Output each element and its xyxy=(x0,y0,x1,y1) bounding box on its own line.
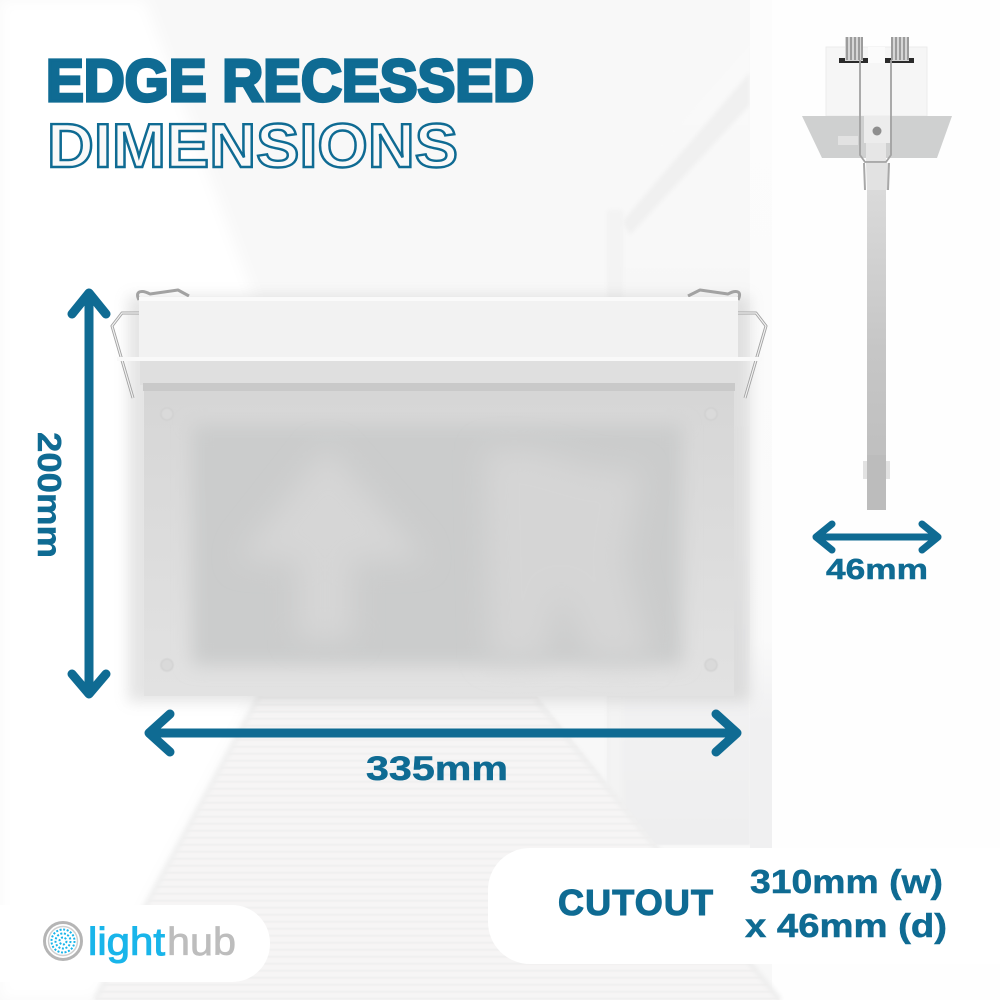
label: 46mm: 46mm xyxy=(826,554,928,586)
dark clip slots xyxy=(839,58,869,63)
lower bracket xyxy=(863,461,890,479)
arrow: width 335mm xyxy=(149,714,737,752)
left spring xyxy=(845,37,863,61)
right spring xyxy=(891,37,909,61)
title xyxy=(46,48,534,181)
cutout width: 310mm (w) xyxy=(750,863,943,900)
logo pill xyxy=(0,905,270,982)
rear box xyxy=(826,47,927,116)
soft drop shadow xyxy=(128,296,750,702)
stem xyxy=(867,190,886,510)
title line: DIMENSIONS (outlined): DIMENSIONS xyxy=(47,112,458,181)
arrow: height 200mm xyxy=(72,293,106,694)
right mounting clip xyxy=(688,290,766,398)
panel fixing dots xyxy=(161,408,717,671)
title line: EDGE RECESSED: EDGE RECESSED xyxy=(46,48,534,114)
arrow: depth 46mm xyxy=(816,524,938,550)
logo icon xyxy=(44,922,82,960)
cutout depth: x 46mm (d) xyxy=(745,907,947,944)
blurred running figure symbol xyxy=(485,450,650,660)
flange xyxy=(117,357,762,361)
cutout heading: CUTOUT xyxy=(558,882,713,923)
left mounting clip xyxy=(112,290,189,398)
front view product: edge-lit exit sign xyxy=(112,290,766,702)
cutout panel xyxy=(488,848,1000,964)
latch xyxy=(866,143,886,162)
housing box xyxy=(139,297,738,358)
side view product xyxy=(802,37,952,510)
frosted centre xyxy=(192,425,682,665)
logo wordmark: hub: hub xyxy=(167,921,236,964)
label: 200mm: 200mm xyxy=(31,432,68,558)
acrylic panel xyxy=(144,391,734,696)
flange plate xyxy=(802,116,952,158)
label: 335mm: 335mm xyxy=(366,750,508,788)
screw xyxy=(872,126,882,136)
underside band xyxy=(140,361,738,385)
logo wordmark: light: light xyxy=(88,921,165,964)
blurred arrow symbol xyxy=(238,447,425,640)
